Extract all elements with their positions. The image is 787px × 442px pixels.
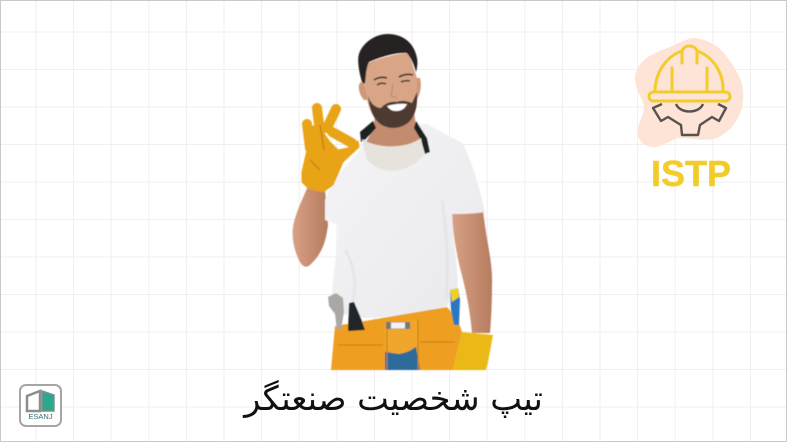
mask straps (360, 121, 430, 154)
beard (368, 92, 417, 128)
right arm (452, 208, 492, 333)
icon: book (27, 391, 40, 411)
left arm (293, 186, 328, 267)
screwdriver (450, 288, 460, 325)
illustration: worker with tool belt (293, 34, 493, 370)
tool belt (331, 307, 462, 370)
wrench (328, 293, 344, 330)
pliers (348, 302, 365, 331)
shirt shading (345, 200, 447, 312)
ISTP label: ISTP (651, 153, 731, 194)
eyes and brows (374, 74, 413, 80)
right glove (453, 332, 493, 370)
glove fingers (307, 108, 352, 148)
ISTP badge (635, 38, 743, 194)
logo: ESANJ (20, 385, 61, 426)
nose (391, 84, 397, 98)
title: تیپ شخصیت صنعتگر (242, 379, 543, 419)
icon: hard hat (649, 46, 730, 101)
neck mask (362, 138, 424, 171)
logo text: ESANJ (28, 412, 53, 421)
belt label (386, 322, 410, 329)
hair (358, 34, 417, 84)
face (365, 53, 417, 128)
neck (366, 112, 421, 149)
blob background (635, 38, 743, 147)
left glove (302, 108, 359, 192)
icon: gear (653, 104, 726, 135)
belt flap (385, 320, 418, 354)
t-shirt (325, 124, 485, 318)
smile (387, 104, 407, 111)
jeans (385, 347, 420, 370)
ears (359, 78, 421, 100)
